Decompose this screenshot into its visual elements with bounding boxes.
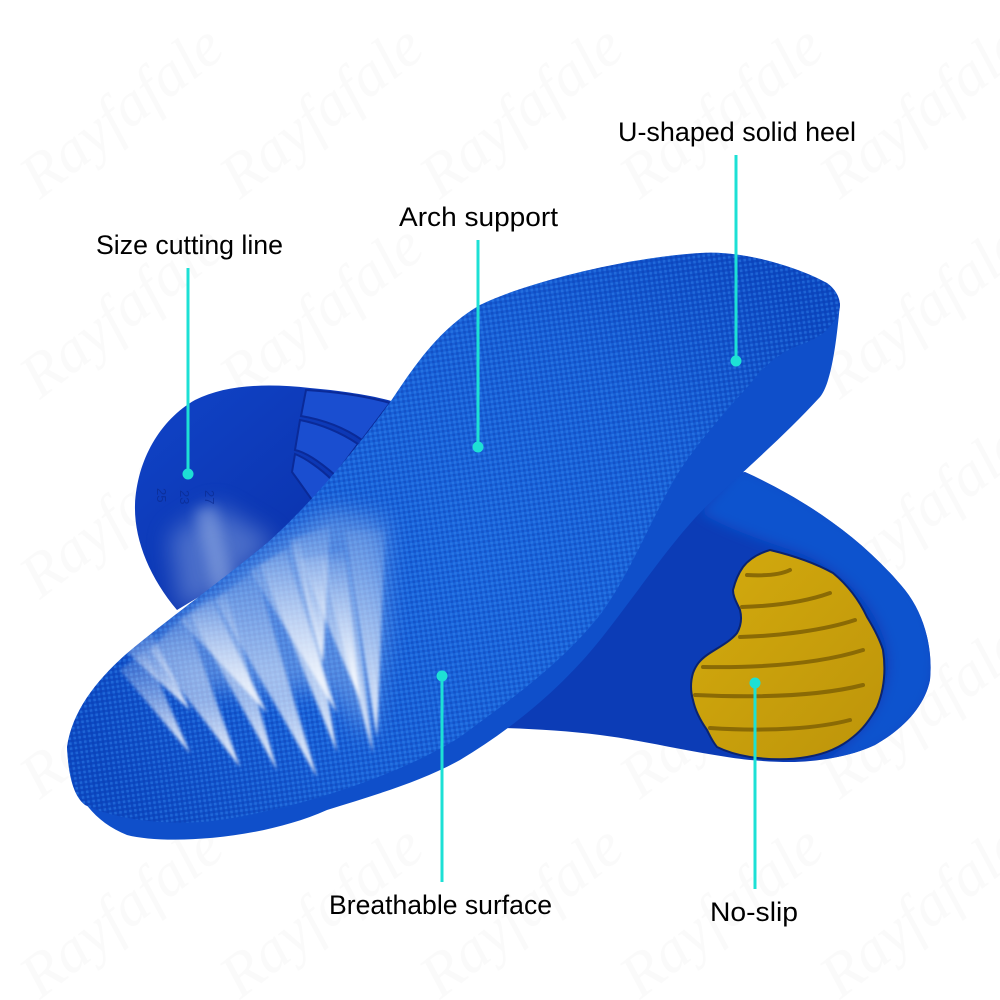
watermark: Rayfafale [606, 11, 836, 212]
back insole: size marks: 27 [202, 490, 217, 504]
callout: breathable surface [329, 670, 552, 920]
back insole: size marks: 23 [177, 490, 192, 504]
callout: heel [618, 117, 856, 366]
label: breathable surface: Breathable surface [329, 890, 552, 920]
watermark: Rayfafale [6, 11, 236, 212]
watermark: Rayfafale [6, 611, 236, 812]
breathable air streaks [120, 510, 385, 777]
top insole: weave texture [67, 253, 840, 823]
watermark: Rayfafale [6, 411, 236, 612]
callout: arch support [399, 202, 559, 452]
leader: no-slip [750, 678, 760, 889]
leader: heel [730, 155, 742, 366]
watermark: Rayfafale [206, 211, 436, 412]
watermark: Rayfafale [606, 611, 836, 812]
callout: size cutting line [96, 230, 283, 480]
label: heel: U-shaped solid heel [618, 117, 856, 147]
leader: arch support [472, 240, 484, 452]
watermark: Rayfafale [406, 11, 636, 212]
watermark: Rayfafale [6, 211, 236, 412]
top insole: surface [67, 253, 840, 823]
leader: breathable surface [436, 670, 448, 882]
back insole: heel sole [135, 386, 395, 610]
yellow no-slip pad [691, 550, 884, 759]
watermark: Rayfafale [206, 11, 436, 212]
label: arch support: Arch support [399, 202, 559, 232]
back insole: forefoot sole [505, 472, 931, 762]
back insole: size marks: 25 [154, 488, 169, 502]
leader: size cutting line [182, 268, 194, 480]
label: no-slip: No-slip [710, 897, 798, 927]
top insole: side wall [67, 303, 840, 840]
back insole: rim highlight [700, 465, 935, 770]
back insole: ribs [292, 390, 390, 500]
insole illustration [67, 253, 935, 840]
label: size cutting line: Size cutting line [96, 230, 283, 260]
back insole: mist [170, 505, 275, 610]
callout: no-slip [710, 678, 798, 927]
back insole: size marks [154, 488, 217, 504]
